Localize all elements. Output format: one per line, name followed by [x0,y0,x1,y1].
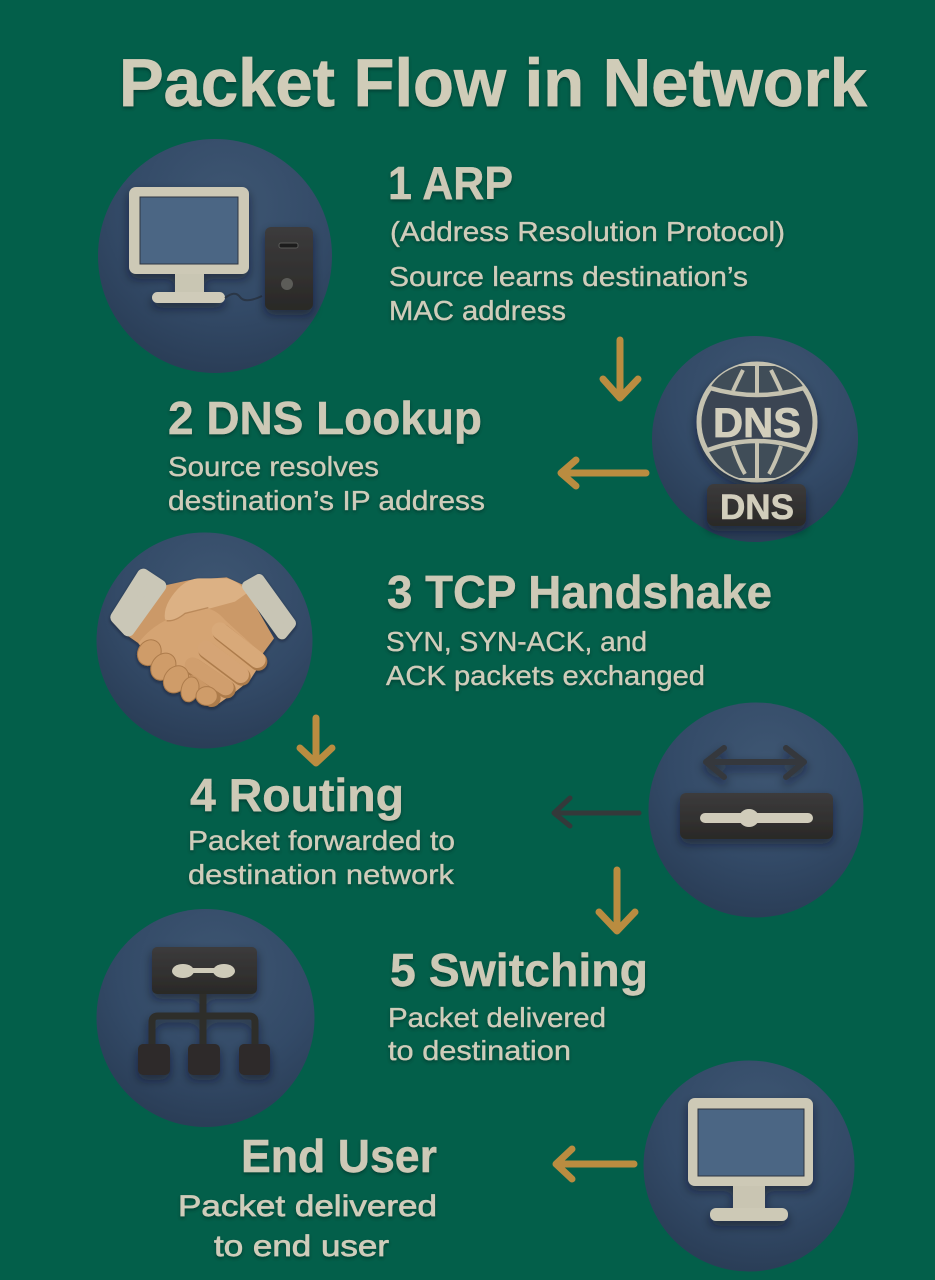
description: TCP Handshake: SYN, SYN-ACK, and [386,626,647,657]
description: Switching: Packet delivered [388,1002,606,1033]
arrow: Routing to TCP side (dark) [554,798,639,826]
heading: 2 DNS Lookup: 2 DNS Lookup [168,392,482,444]
description: ARP: Source learns destination’s [389,261,748,292]
icon: router [648,702,864,918]
heading: 1 ARP: 1 ARP [388,157,513,209]
icon: monitor [644,1060,854,1272]
icon: network switch [96,909,314,1127]
icon: DNS globe [652,336,858,542]
title: Packet Flow in Network [119,45,867,121]
icon: DNS globe: DNS [720,488,794,527]
description: End User [178,1190,437,1263]
description: TCP Handshake: ACK packets exchanged [386,660,705,691]
heading: 5 Switching: 5 Switching [390,944,648,996]
description: DNS Lookup: destination’s IP address [168,485,485,516]
arrow: ARP to DNS [603,340,638,398]
description: Routing: Packet forwarded to [188,825,455,856]
panel: step 2 DNS Lookup [168,336,858,542]
description: Routing: destination network [188,859,455,890]
heading: End User: End User [241,1130,437,1182]
description: DNS Lookup [168,451,485,516]
description: Routing [188,825,455,890]
description: TCP Handshake [386,626,705,691]
arrow: DNS to TCP [561,460,646,486]
description: Switching [388,1002,606,1066]
heading: 3 TCP Handshake: 3 TCP Handshake [387,566,772,618]
description: End User: to end user [214,1230,389,1263]
arrow: TCP to Routing [300,718,332,763]
icon: DNS globe: DNS [713,399,801,446]
description: ARP: (Address Resolution Protocol) [390,216,785,247]
description: ARP [389,216,785,326]
panel: step 1 ARP [98,139,785,373]
panel: step 4 Routing [188,702,864,918]
arrow: Routing to Switching [599,870,635,931]
panel: step 3 TCP Handshake [96,532,772,748]
icon: desktop computer [98,139,332,373]
arrow: Switching to End User [556,1149,634,1179]
description: ARP: MAC address [389,295,566,326]
description: Switching: to destination [388,1035,571,1066]
panel: step 5 Switching [96,909,648,1127]
panel: End User [178,1060,854,1272]
heading: 4 Routing: 4 Routing [190,769,404,821]
icon: handshake [96,532,312,748]
description: DNS Lookup: Source resolves [168,451,379,482]
description: End User: Packet delivered [178,1190,437,1223]
